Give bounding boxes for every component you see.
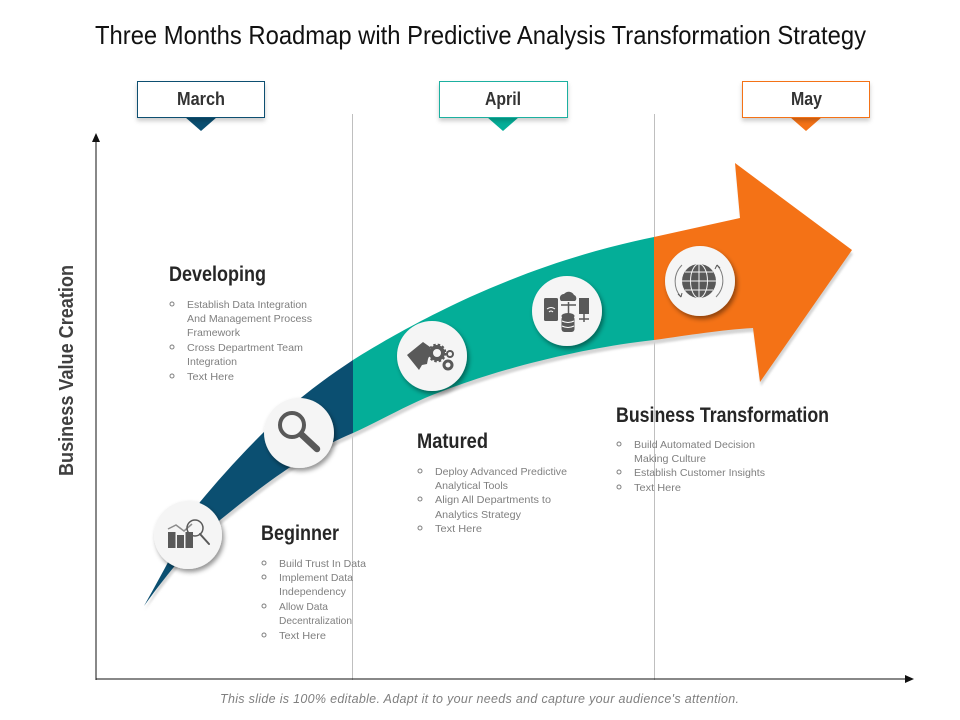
month tab: May xyxy=(742,82,870,131)
text block: Developing: Text Here xyxy=(187,371,234,383)
month tab: March xyxy=(138,82,264,131)
text block: Business Transformation xyxy=(616,404,829,494)
text block: Business Transformation: Making Culture xyxy=(634,453,706,465)
arrow segment: May with head xyxy=(654,163,852,382)
text block: Beginner: Independency xyxy=(279,586,347,598)
text block: Developing: Framework xyxy=(187,327,241,339)
column dividers xyxy=(352,114,654,680)
text block: Matured: Matured xyxy=(417,430,488,453)
text block: Beginner: Text Here xyxy=(279,630,326,642)
month tab: May: May xyxy=(791,89,822,109)
month tab: April xyxy=(440,82,568,131)
text block: Matured: Analytical Tools xyxy=(435,480,508,492)
text block: Matured xyxy=(417,430,567,535)
arrow segment: March xyxy=(144,360,353,606)
text block: Beginner: Allow Data xyxy=(279,601,328,613)
text block: Matured: Deploy Advanced Predictive xyxy=(435,466,567,478)
icon disc: magnifier xyxy=(264,398,334,468)
y-axis label: Business Value Creation xyxy=(56,265,78,476)
text block: Matured: Align All Departments to xyxy=(435,494,551,506)
text block: Developing xyxy=(169,263,312,383)
text block: Developing: Integration xyxy=(187,356,237,368)
icon disc: bar chart with magnifier xyxy=(154,501,222,569)
text block: Business Transformation: Build Automated Decision xyxy=(634,439,755,451)
text block: Matured: Text Here xyxy=(435,523,482,535)
title: Three Months Roadmap with Predictive Analysis Transformation Strategy xyxy=(95,20,866,50)
icon disc: puzzle and gears xyxy=(397,321,467,391)
text block: Beginner: Build Trust In Data xyxy=(279,558,366,570)
text block: Beginner: Beginner xyxy=(261,522,339,545)
text block: Business Transformation: Establish Customer Insights xyxy=(634,467,765,479)
footer note: This slide is 100% editable. Adapt it to your needs and capture your audience's attention. xyxy=(220,692,739,706)
icon disc: cloud data network xyxy=(532,276,602,346)
growth arrow xyxy=(144,163,853,610)
chart axes xyxy=(92,133,914,683)
icon disc: globe xyxy=(665,246,735,316)
text block: Developing: And Management Process xyxy=(187,313,312,325)
text block: Matured: Analytics Strategy xyxy=(435,509,522,521)
text block: Beginner: Decentralization xyxy=(279,615,352,627)
arrow shadow xyxy=(145,167,853,610)
text block: Business Transformation: Text Here xyxy=(634,482,681,494)
arrow segment: April xyxy=(353,237,654,433)
text block: Business Transformation: Business Transformation xyxy=(616,404,829,427)
text block: Beginner xyxy=(261,522,366,642)
text block: Beginner: Implement Data xyxy=(279,572,353,584)
text block: Developing: Cross Department Team xyxy=(187,342,303,354)
text block: Developing: Establish Data Integration xyxy=(187,299,307,311)
month tab: April: April xyxy=(485,89,521,109)
month tab: March: March xyxy=(177,89,225,109)
text block: Developing: Developing xyxy=(169,263,266,286)
